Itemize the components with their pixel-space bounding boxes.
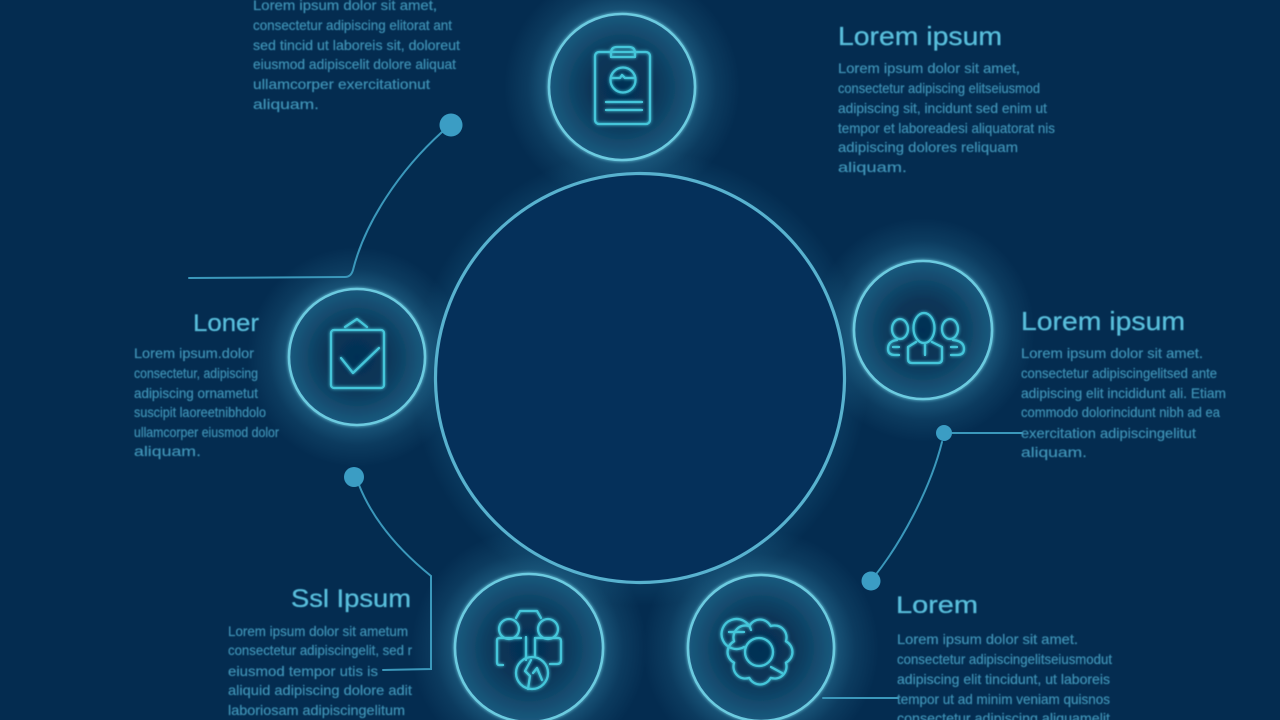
text block: right	[1021, 306, 1226, 460]
text block: top right: aliquam.	[838, 159, 907, 175]
text block: bottom right: adipiscing elit tincidunt, ut laboreis	[897, 671, 1110, 687]
node: checklist	[289, 289, 425, 425]
text block: left: ullamcorper eiusmod dolor	[134, 424, 279, 440]
text block: right: exercitation adipiscingelitut	[1021, 425, 1196, 441]
node: team	[854, 261, 992, 399]
icon: clipboard	[595, 47, 650, 124]
text block: top left: eiusmod adipiscelit dolore aliquat	[253, 56, 456, 72]
text block: top right: consectetur adipiscing elitseiusmod	[838, 80, 1040, 96]
text block: right: aliquam.	[1021, 444, 1087, 460]
icon: three people	[888, 313, 964, 363]
text block: top right: adipiscing sit, incidunt sed enim ut	[838, 100, 1047, 116]
text block: top left	[253, 0, 460, 112]
text block: bottom right: consectetur adipiscingelitseiusmodut	[897, 651, 1112, 667]
heading: bottom right: Lorem	[896, 592, 978, 619]
node: clipboard	[549, 14, 695, 160]
text block: bottom left: Lorem ipsum dolor sit ametum	[228, 623, 408, 639]
text block: top right: adipiscing dolores reliquam	[838, 139, 1018, 155]
connector: bottom right	[823, 697, 898, 699]
text block: bottom left	[228, 585, 412, 718]
central ring	[436, 174, 844, 582]
text block: left: aliquam.	[134, 443, 201, 459]
text block: top left: sed tincid ut laboreis sit, doloreut	[253, 37, 460, 53]
heading: right: Lorem ipsum	[1021, 306, 1185, 336]
heading: top right: Lorem ipsum	[838, 21, 1002, 51]
text block: left: Lorem ipsum.dolor	[134, 345, 254, 361]
text block: bottom right: Lorem ipsum dolor sit amet.	[897, 631, 1078, 647]
text block: bottom right	[896, 592, 1112, 720]
heading: bottom left: Ssl Ipsum	[291, 585, 411, 613]
text block: left	[134, 310, 279, 459]
text block: top left: ullamcorper exercitationut	[253, 76, 430, 92]
text block: top left: aliquam.	[253, 96, 319, 112]
connector: right	[862, 425, 1022, 590]
text block: bottom right: tempor ut ad minim veniam quisnos	[897, 691, 1110, 707]
icon: people with globe	[497, 611, 561, 689]
icon: gears	[722, 619, 792, 684]
node: people and globe	[455, 574, 603, 720]
text block: top right: Lorem ipsum dolor sit amet,	[838, 60, 1020, 76]
text block: top right	[838, 21, 1055, 175]
text block: right: adipiscing elit incididunt ali. Etiam	[1021, 385, 1226, 401]
text block: top left: consectetur adipiscing elitorat ant	[253, 17, 452, 33]
connector: top left	[189, 114, 462, 278]
text block: left: consectetur, adipiscing	[134, 365, 258, 381]
text block: top right: tempor et laboreadesi aliquatorat nis	[838, 120, 1055, 136]
text block: bottom left: laboriosam adipiscingelitum	[228, 702, 405, 718]
connector: left lower	[344, 467, 431, 670]
text block: right: commodo dolorincidunt nibh ad ea	[1021, 404, 1220, 420]
text block: bottom left: eiusmod tempor utis is	[228, 663, 378, 679]
text block: bottom left: consectetur adipiscingelit, sed r	[228, 642, 412, 658]
text block: left: suscipit laoreetnibhdolo	[134, 404, 266, 420]
text block: left: adipiscing ornametut	[134, 385, 258, 401]
icon: check document	[331, 319, 384, 388]
node: gears	[688, 575, 834, 720]
text block: right: Lorem ipsum dolor sit amet.	[1021, 345, 1203, 361]
text block: right: consectetur adipiscingelitsed ante	[1021, 365, 1217, 381]
heading: left: Loner	[193, 310, 259, 337]
text block: bottom left: aliquid adipiscing dolore adit	[228, 682, 412, 698]
